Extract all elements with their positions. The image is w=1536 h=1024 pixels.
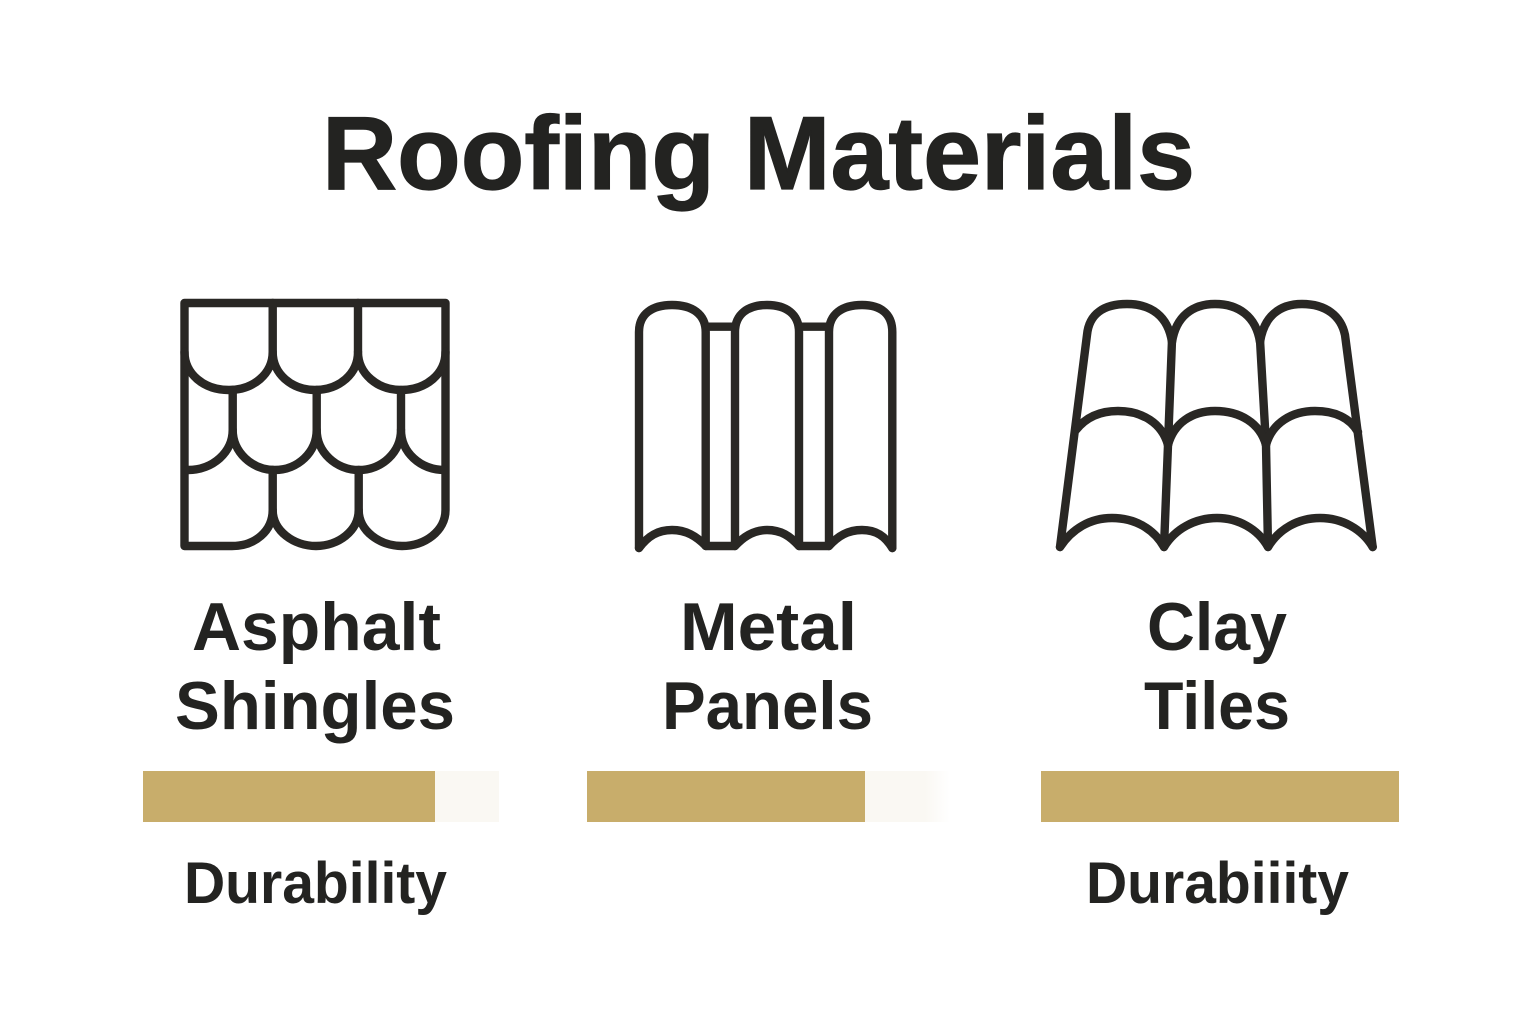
panel: asphalt shingles [143,303,499,916]
icon: metal panels [639,305,892,548]
label: metal panels [662,589,873,744]
durability bar: clay tiles [1041,771,1399,822]
icon: clay tiles [1060,304,1373,547]
panel: clay tiles [1041,304,1399,916]
panel: metal panels [587,305,950,822]
label: asphalt shingles [175,589,455,744]
label: asphalt shingles: Shingles [175,668,455,744]
durability bar: asphalt shingles [143,771,499,822]
label: metal panels: Panels [662,668,873,744]
label: asphalt shingles: Asphalt [192,589,441,665]
icon: asphalt shingles [184,303,446,546]
label: clay tiles: Tiles [1144,668,1290,744]
label: clay tiles [1144,589,1290,744]
durability label: asphalt shingles: Durability [184,851,447,916]
title: Roofing Materials [322,96,1195,212]
durability label: clay tiles: Durabiiity [1086,851,1349,916]
label: clay tiles: Clay [1147,589,1287,665]
durability bar: metal panels [587,771,950,822]
label: metal panels: Metal [680,589,857,665]
